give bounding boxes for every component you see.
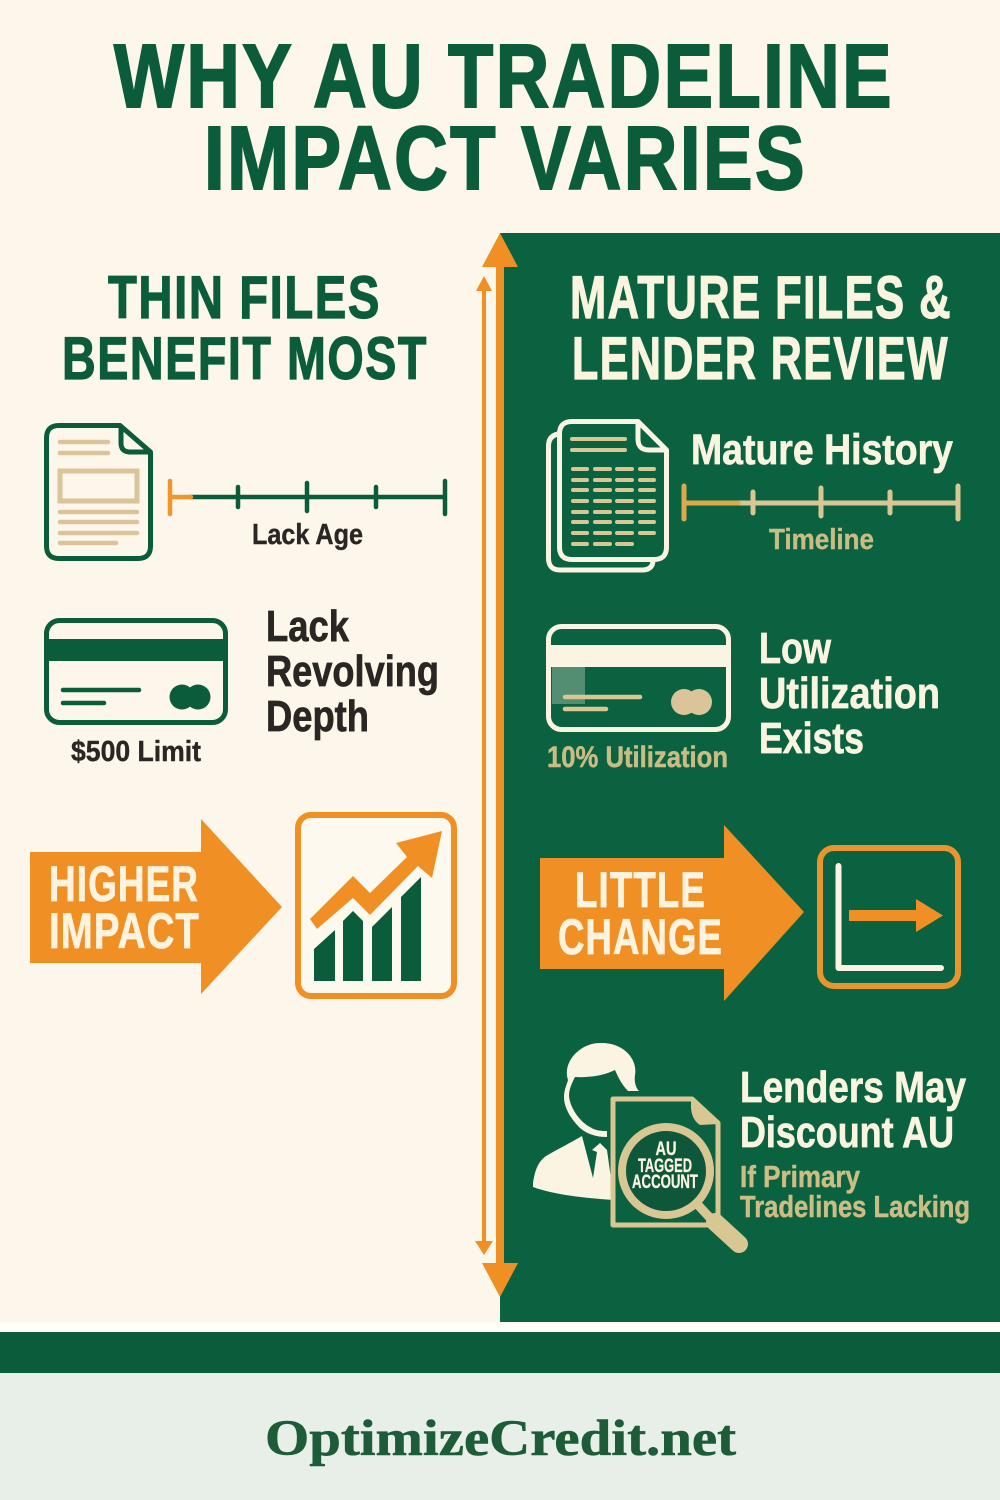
heading: mature files	[570, 264, 952, 392]
arrow: little change: CHANGE	[558, 909, 723, 965]
heading: thin files: THIN FILES	[108, 264, 381, 331]
heading: thin files	[62, 264, 428, 392]
text: if primary tradelines lacking: If Primary	[740, 1159, 861, 1194]
text: lack revolving depth: Lack	[266, 602, 349, 651]
title	[114, 27, 894, 209]
arrow: little change	[540, 825, 804, 1001]
icon: credit card, 10% utilization	[548, 626, 728, 730]
icon: credit card, $500 limit	[46, 620, 226, 722]
arrow: little change: LITTLE	[575, 862, 706, 918]
chart: mature timeline	[684, 486, 958, 519]
icon: flat chart	[820, 848, 958, 986]
footer panel	[0, 1373, 1000, 1500]
panel: mature files background	[500, 233, 1000, 1322]
label: 10% utilization: 10% Utilization	[547, 741, 728, 774]
arrow: small double-headed divider	[475, 276, 493, 1255]
text: low utilization exists: Exists	[759, 714, 864, 763]
text: lenders may discount AU: Discount AU	[740, 1108, 954, 1157]
chart: lack age timeline	[170, 481, 445, 514]
text: lack revolving depth: Revolving	[266, 647, 439, 696]
icon: thin file document	[46, 426, 150, 558]
label: $500 limit: $500 Limit	[71, 736, 201, 768]
icon: mature file document stack	[548, 422, 666, 570]
text: lack revolving depth: Depth	[266, 692, 369, 741]
footer panel: OptimizeCredit.net	[265, 1411, 736, 1467]
icon: lender reviewing AU account: TAGGED	[638, 1156, 692, 1177]
arrow: large double-headed divider	[482, 233, 518, 1297]
text: lenders may discount AU	[740, 1063, 966, 1157]
label: mature history: Mature History	[691, 426, 953, 474]
text: low utilization exists: Utilization	[759, 669, 940, 718]
title: IMPACT VARIES	[204, 109, 807, 209]
text: low utilization exists: Low	[759, 624, 832, 673]
text: lack revolving depth	[266, 602, 439, 741]
label: timeline: Timeline	[769, 524, 874, 556]
arrow: higher impact	[30, 819, 282, 994]
heading: thin files: BENEFIT MOST	[62, 325, 428, 392]
arrow: higher impact: HIGHER	[49, 856, 199, 912]
footer band	[0, 1332, 1000, 1373]
text: if primary tradelines lacking	[740, 1159, 970, 1224]
icon: rising chart	[298, 815, 454, 996]
icon: lender reviewing AU account	[533, 1043, 739, 1244]
label: lack age: Lack Age	[252, 519, 363, 551]
arrow: higher impact: IMPACT	[49, 903, 200, 959]
icon: lender reviewing AU account: ACCOUNT	[632, 1172, 698, 1193]
icon: lender reviewing AU account: AU	[656, 1139, 676, 1160]
text: low utilization exists	[759, 624, 940, 763]
